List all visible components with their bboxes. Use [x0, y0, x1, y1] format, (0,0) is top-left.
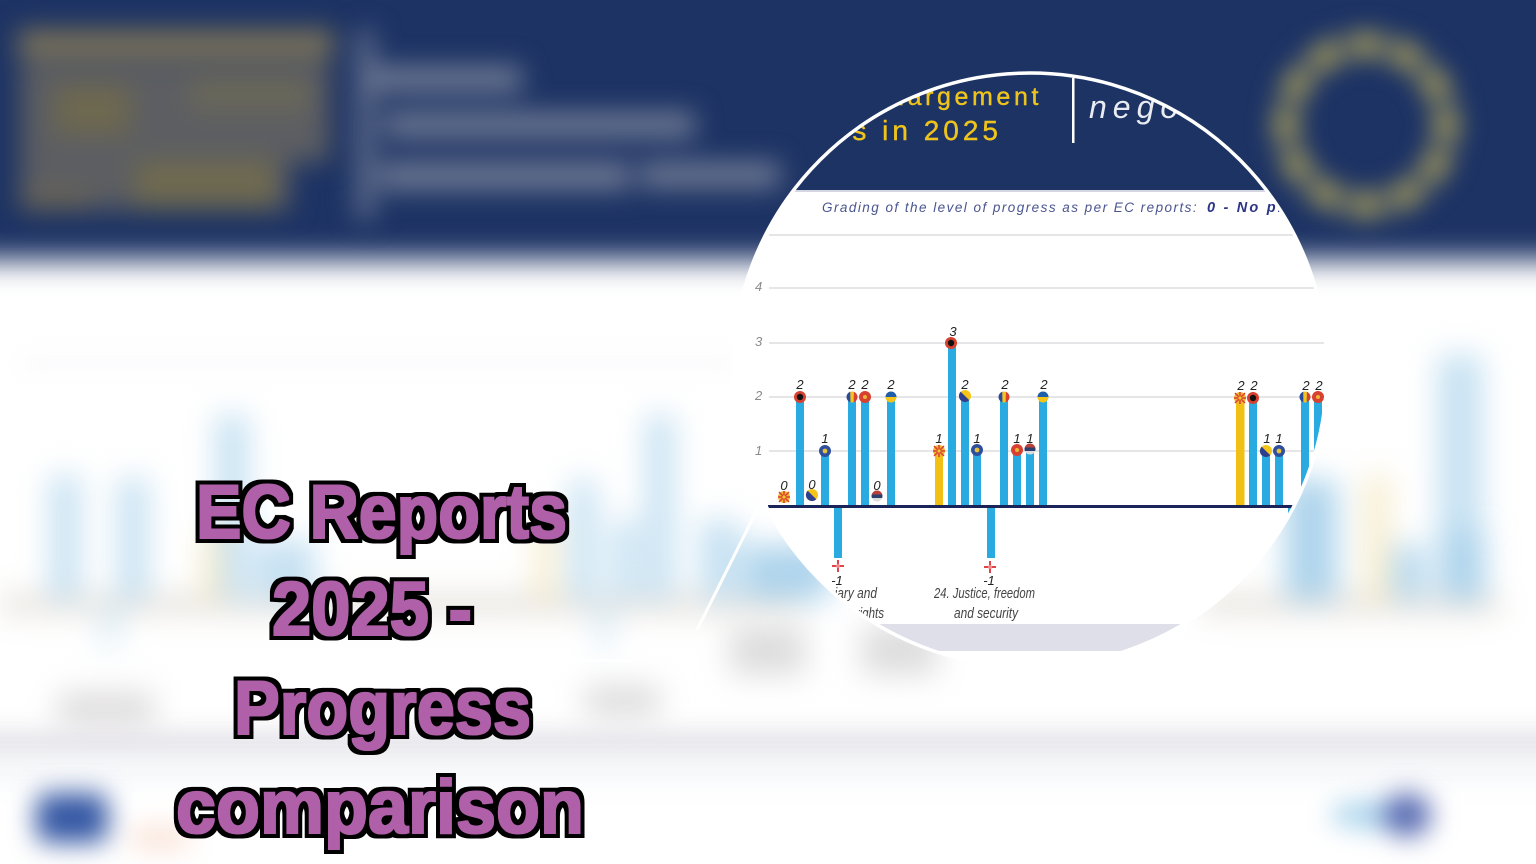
- background: blurred legend band: [0, 734, 1536, 756]
- bar value labels: -1: [831, 573, 843, 588]
- bar value labels: 0: [780, 478, 788, 493]
- background: blurred gridlines: [20, 362, 740, 365]
- background: blurred category labels: [58, 625, 937, 726]
- bar value labels: 2: [1039, 377, 1048, 392]
- bar value labels: 2: [1000, 377, 1009, 392]
- y axis labels: [755, 282, 762, 455]
- bar value labels: 1: [935, 431, 943, 446]
- grading legend: 0 - No progress: [1207, 200, 1346, 216]
- grading legend: Grading of the level of progress as per EC reports:: [822, 200, 1198, 215]
- background: blurred header band: [0, 0, 1536, 260]
- title overlay: Progress: [234, 666, 531, 751]
- y axis labels: 1: [755, 443, 762, 458]
- category label: judiciary: fundamental rights: [789, 605, 884, 622]
- bar value labels: [780, 324, 1323, 588]
- background: blurred footer logos: [36, 793, 1431, 852]
- background: blurred yellow heading: [18, 30, 334, 210]
- magnified header: countries in 2025: [721, 115, 1002, 146]
- title overlay: EC Reports: [196, 470, 567, 555]
- header divider: [1072, 78, 1074, 143]
- bar value labels: 1: [1026, 431, 1034, 446]
- header subtitle text: negotiating: [1089, 89, 1312, 125]
- bar value labels: 1: [1275, 431, 1283, 446]
- title overlay: 2025 -: [272, 567, 472, 652]
- bar value labels: 2: [847, 377, 856, 392]
- bar value labels: 2: [860, 377, 869, 392]
- bar value labels: 2: [960, 377, 969, 392]
- country flag markers: [778, 337, 1324, 573]
- lens ring: [733, 73, 1327, 667]
- category label: judiciary: [833, 587, 884, 618]
- category label: justice: and security: [954, 605, 1019, 622]
- category label: judiciary: 23. Judiciary and: [786, 585, 878, 602]
- bar value labels: 2: [1301, 378, 1310, 393]
- lens content: [748, 78, 1324, 653]
- chart bars: [796, 343, 1322, 558]
- bar value labels: 0: [808, 477, 816, 492]
- bar value labels: -1: [983, 573, 995, 588]
- bar value labels: 0: [873, 478, 881, 493]
- legend band: [880, 624, 1180, 651]
- background: blurred EU star ring: [1270, 29, 1462, 221]
- bar value labels: 2: [1236, 378, 1245, 393]
- category label: justice: 24. Justice, freedom: [933, 585, 1035, 602]
- category label: justice: [933, 585, 1035, 622]
- header title text: Enlargement: [861, 83, 1042, 111]
- y axis labels: 2: [754, 388, 763, 403]
- bar value labels: 2: [1314, 378, 1323, 393]
- bar value labels: 3: [949, 324, 957, 339]
- background: blurred bar chart: [0, 355, 1500, 648]
- magnified header: [794, 74, 1266, 192]
- title overlay: comparison: [176, 765, 584, 850]
- y axis labels: 4: [755, 279, 762, 294]
- background: blurred white subtitle: [356, 30, 780, 220]
- bar value labels: 2: [1249, 378, 1258, 393]
- bar value labels: 1: [1263, 431, 1271, 446]
- bar value labels: 1: [821, 431, 829, 446]
- y axis labels: 3: [755, 334, 763, 349]
- title overlay: [176, 470, 584, 850]
- bar value labels: 2: [795, 377, 804, 392]
- magnifier connector lines: [252, 500, 762, 660]
- chart baseline: [768, 505, 1328, 508]
- bar value labels: 1: [973, 431, 981, 446]
- bar value labels: 1: [1013, 431, 1021, 446]
- magnifier lens: [721, 73, 1346, 667]
- bar value labels: 2: [886, 377, 895, 392]
